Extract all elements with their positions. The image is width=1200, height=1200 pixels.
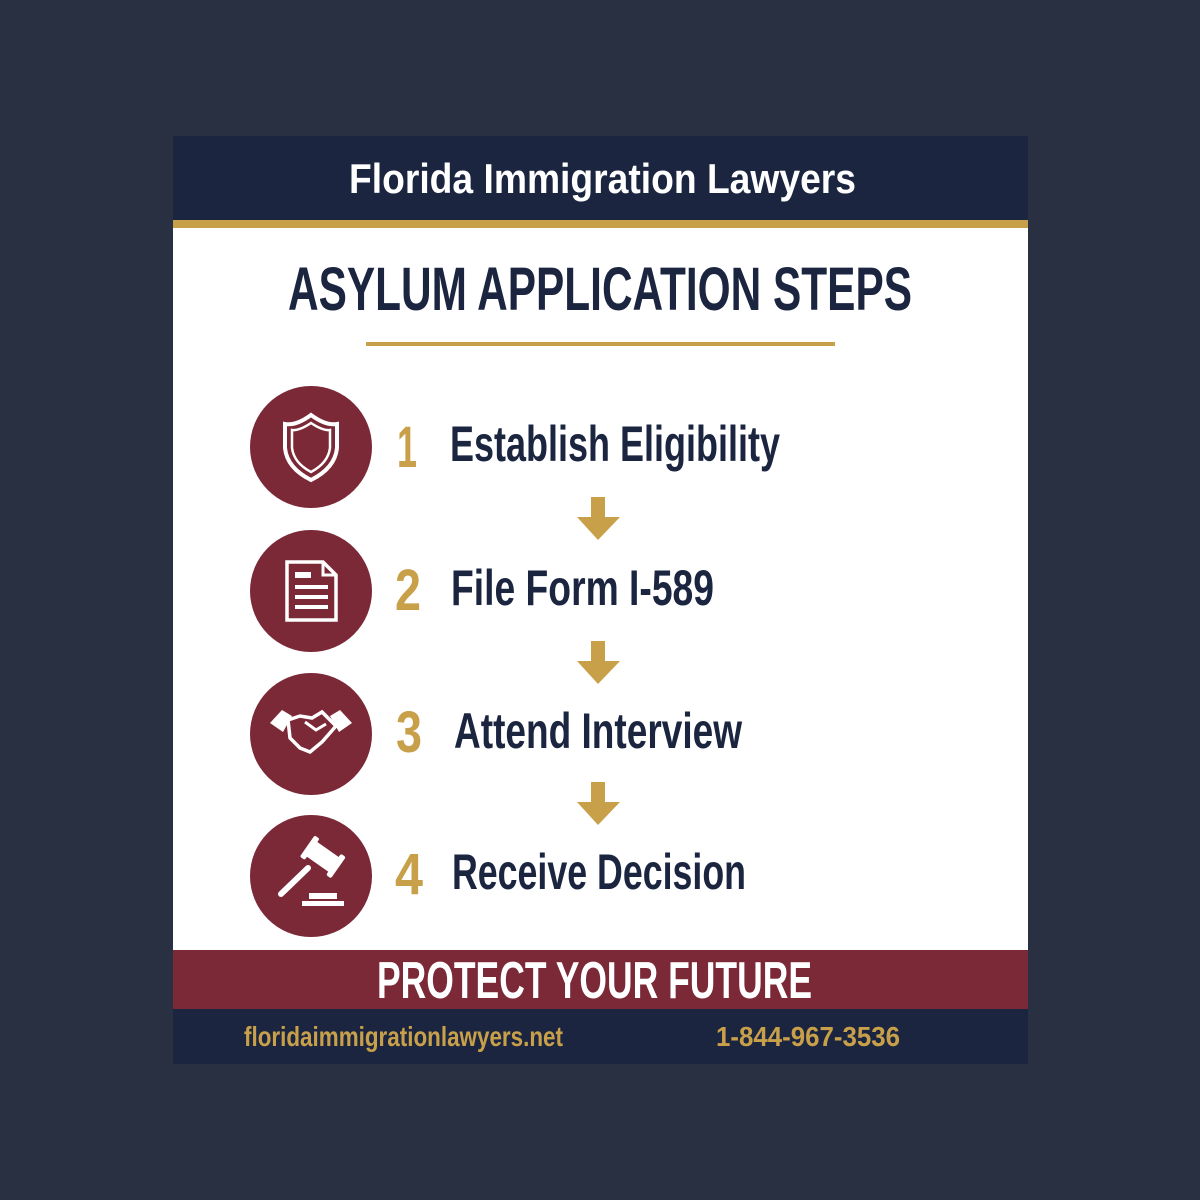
- icon: gavel: [250, 815, 372, 937]
- icon: shield: [250, 386, 372, 508]
- number 1: 1: [397, 415, 417, 480]
- website: floridaimmigrationlawyers.net: [244, 1021, 563, 1052]
- title: ASYLUM APPLICATION STEPS: [288, 255, 912, 323]
- label: Attend Interview: [454, 703, 742, 759]
- icon: document: [250, 530, 372, 652]
- banner: protect your future: PROTECT YOUR FUTURE: [377, 952, 812, 1010]
- header bar: [173, 136, 1028, 228]
- arrow 3: [577, 782, 620, 825]
- card: [173, 136, 1028, 1064]
- header text: Florida Immigration Lawyers: [349, 155, 856, 202]
- number 3: 3: [396, 700, 422, 765]
- label: Establish Eligibility: [450, 416, 780, 472]
- step 1: [250, 386, 780, 508]
- arrow 1: [577, 497, 620, 540]
- number 4: 4: [395, 842, 423, 907]
- footer: [173, 1009, 1028, 1064]
- label: Receive Decision: [452, 844, 746, 900]
- label: File Form I-589: [451, 560, 714, 616]
- arrow 2: [577, 641, 620, 684]
- phone: 1-844-967-3536: [716, 1021, 900, 1052]
- title underline: [366, 342, 835, 346]
- number 2: 2: [395, 558, 421, 623]
- step 4: [250, 815, 746, 937]
- step 2: [250, 530, 714, 652]
- icon: handshake: [250, 673, 372, 795]
- step 3: [250, 673, 742, 795]
